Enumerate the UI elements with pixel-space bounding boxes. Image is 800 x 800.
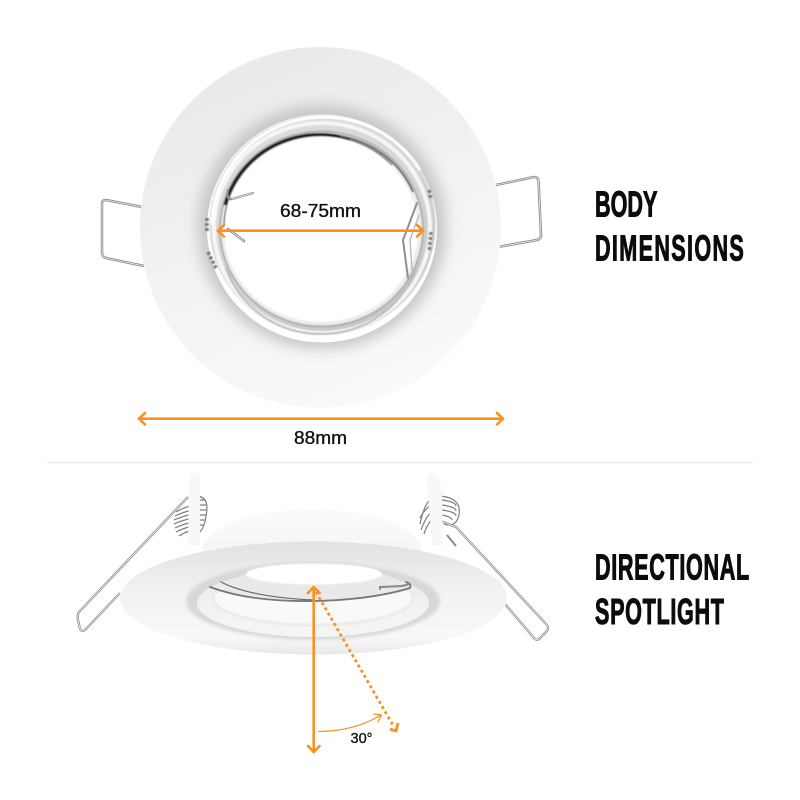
white front ring <box>120 542 507 654</box>
arrow: 30 degree arc <box>319 714 382 732</box>
chrome inner ring <box>207 115 436 335</box>
spring wires inside ring <box>228 190 419 278</box>
label: 88mm: 88mm <box>294 428 347 448</box>
inner white housing <box>197 569 429 637</box>
icon: right mounting clip <box>496 177 541 247</box>
chrome retaining clip <box>210 582 410 601</box>
arrow: inner diameter <box>218 225 423 236</box>
label: 30 degrees: 30° <box>350 730 372 747</box>
arrow: tilted axis dotted <box>316 592 398 731</box>
icon: left spring and clip <box>78 496 207 631</box>
heading: body dimensions: DIMENSIONS <box>595 229 744 269</box>
lamp opening <box>246 564 382 584</box>
arrow: vertical axis <box>308 587 320 752</box>
left tab <box>188 473 200 545</box>
arrow: outer diameter <box>139 413 503 424</box>
icon: right spring and clip <box>420 496 548 640</box>
heading: directional spotlight <box>595 548 749 633</box>
heading: body dimensions: BODY <box>595 185 658 225</box>
soft shadow around opening <box>198 105 446 349</box>
right tab <box>427 473 443 545</box>
recess shadow <box>186 562 440 640</box>
upper inner shade <box>222 564 408 601</box>
heading: directional spotlight: SPOTLIGHT <box>595 593 724 633</box>
inner step <box>213 571 413 625</box>
chrome inner opening <box>224 137 418 322</box>
label: 68-75mm: 68-75mm <box>280 201 361 221</box>
panel: body dimensions product view <box>102 47 541 448</box>
white outer ring <box>140 47 501 408</box>
panel: directional spotlight product view <box>78 473 548 752</box>
fixture dome <box>202 509 422 595</box>
heading: body dimensions <box>595 185 744 269</box>
icon: left mounting clip <box>102 200 144 266</box>
ring opening <box>207 114 437 342</box>
heading: directional spotlight: DIRECTIONAL <box>595 548 749 588</box>
